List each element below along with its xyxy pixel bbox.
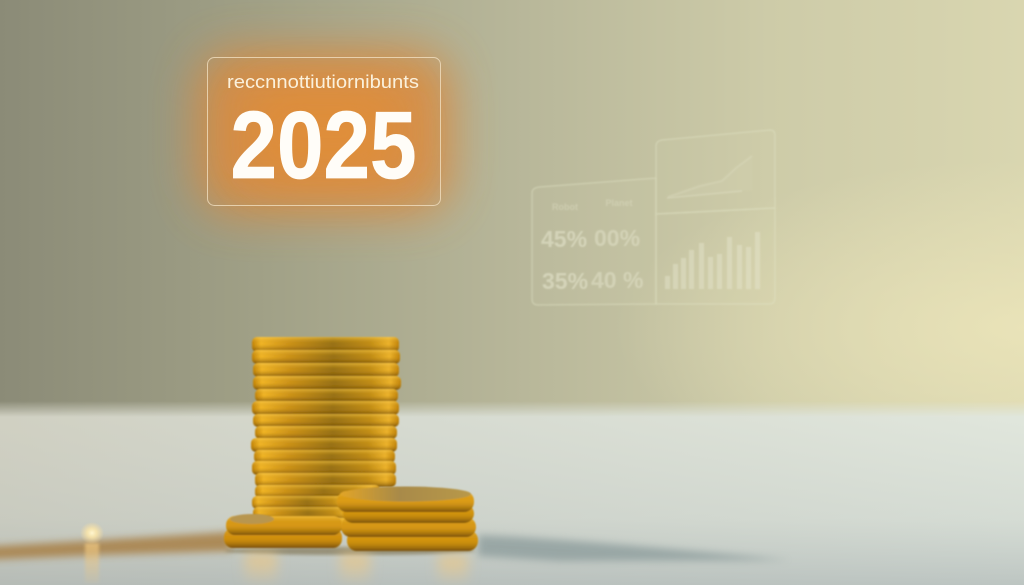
faint dashboard panel — [532, 130, 775, 305]
year number: 2025 — [230, 92, 416, 199]
tall coin stack — [251, 337, 401, 530]
top right line chart panel — [656, 130, 775, 214]
left stats panel: 35% — [542, 268, 588, 294]
coin reflections on table — [85, 543, 468, 583]
light spark — [80, 522, 104, 544]
small left coin pile — [224, 514, 342, 548]
table surface — [0, 400, 1024, 585]
left stats panel: 45% — [541, 226, 587, 252]
bottom right bar chart panel — [656, 208, 775, 304]
table shadow and light streak — [0, 532, 790, 561]
card caption: reccnnottiutiornibunts — [227, 71, 419, 92]
left stats panel: Planet — [605, 198, 633, 208]
left stats panel: 00% — [594, 225, 640, 251]
left stats panel: Robot — [552, 202, 578, 212]
left stats panel — [532, 178, 656, 305]
background wall — [0, 0, 1024, 420]
card outline — [208, 58, 440, 206]
left stats panel: 40 % — [591, 267, 643, 293]
orange glow behind year card — [196, 50, 452, 214]
year card — [208, 58, 440, 206]
small right coin pile — [337, 486, 478, 551]
